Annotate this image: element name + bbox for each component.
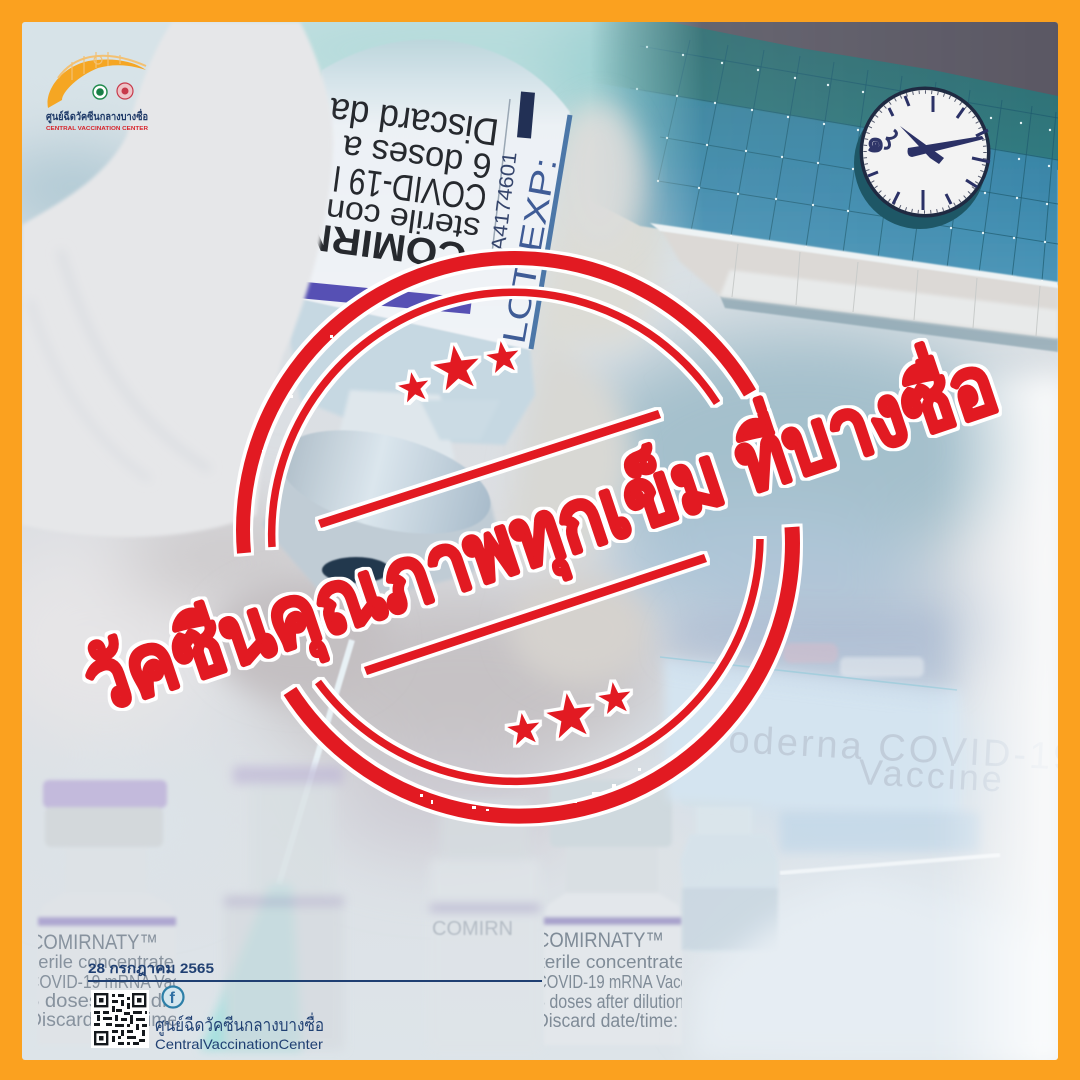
footer date: 28 กรกฎาคม 2565: [88, 960, 214, 977]
main vial: Discard da: [326, 89, 501, 153]
main vial: COMIRN: [300, 214, 469, 277]
lower vials: [24, 766, 778, 1050]
moderna box: Vaccine: [858, 751, 1006, 800]
vial: left: sterile concentrate: [24, 952, 174, 972]
needle: [200, 640, 352, 1050]
stamp: [69, 258, 1010, 816]
stamp distress marks: [252, 335, 641, 811]
main vial: [262, 39, 570, 592]
footer handle: CentralVaccinationCenter: [155, 1036, 323, 1052]
right edge fade: [951, 367, 1058, 1060]
vial: left: COVID-19 mRNA Vacc: [28, 972, 188, 992]
stars top: [396, 339, 521, 403]
vial: right: COVID-19 mRNA Vacc: [536, 972, 688, 992]
icon: hospital emblem: [117, 83, 133, 99]
concrete beam: [650, 223, 1058, 352]
clock numeral: ๑: [866, 126, 885, 159]
clock: [854, 86, 990, 229]
main vial: LOT/EXP:: [495, 155, 564, 346]
main vial: COVID-19 I: [330, 158, 489, 219]
building facade with grid: [590, 22, 1058, 286]
icon: bridge arc: [48, 52, 146, 108]
main vial: FA4174601: [486, 151, 522, 265]
vial: right: [542, 781, 683, 1027]
footer rule: [88, 980, 542, 982]
vial: middle right: COMIRN: [432, 918, 513, 940]
icon: facebook: f: [170, 990, 176, 1007]
logo: [46, 52, 148, 132]
vial: left: Discard date/time: [28, 1010, 178, 1031]
stars bottom: [506, 680, 633, 746]
vial: middle left: [224, 766, 344, 1050]
stamp divider lines: [318, 410, 707, 675]
vial: right: Discard date/time:: [536, 1011, 678, 1032]
vial: right: 6 doses after dilution: [536, 992, 684, 1013]
main vial: 6 doses a: [340, 127, 494, 186]
stamp rings: [243, 258, 792, 816]
icon: facebook: [162, 986, 184, 1008]
moderna box: oderna COVID-19: [728, 719, 1078, 779]
vial: middle right: [429, 804, 541, 936]
gauze pads: [675, 918, 1058, 1060]
vial: right: COMIRNATY™: [536, 929, 664, 952]
vial: moderna small: [682, 882, 778, 951]
vial: left: 6 doses after dilut: [28, 991, 189, 1012]
footer page name: ศูนย์ฉีดวัคซีนกลางบางซื่อ: [155, 1012, 324, 1036]
vial: right: sterile concentrate: [530, 952, 685, 972]
logo name: ศูนย์ฉีดวัคซีนกลางบางซื่อ: [46, 108, 148, 124]
moderna box: [660, 612, 1078, 873]
glove finger: [22, 22, 333, 537]
vial: left: [36, 778, 178, 1026]
QR code: [91, 990, 149, 1048]
grey fog beside building: [558, 100, 642, 250]
main vial: sterile con: [324, 192, 482, 248]
vial: left: COMIRNATY™: [30, 931, 158, 954]
clock numeral: [868, 128, 898, 152]
icon: ministry emblem: [93, 85, 107, 99]
logo subtitle: CENTRAL VACCINATION CENTER: [46, 126, 148, 132]
